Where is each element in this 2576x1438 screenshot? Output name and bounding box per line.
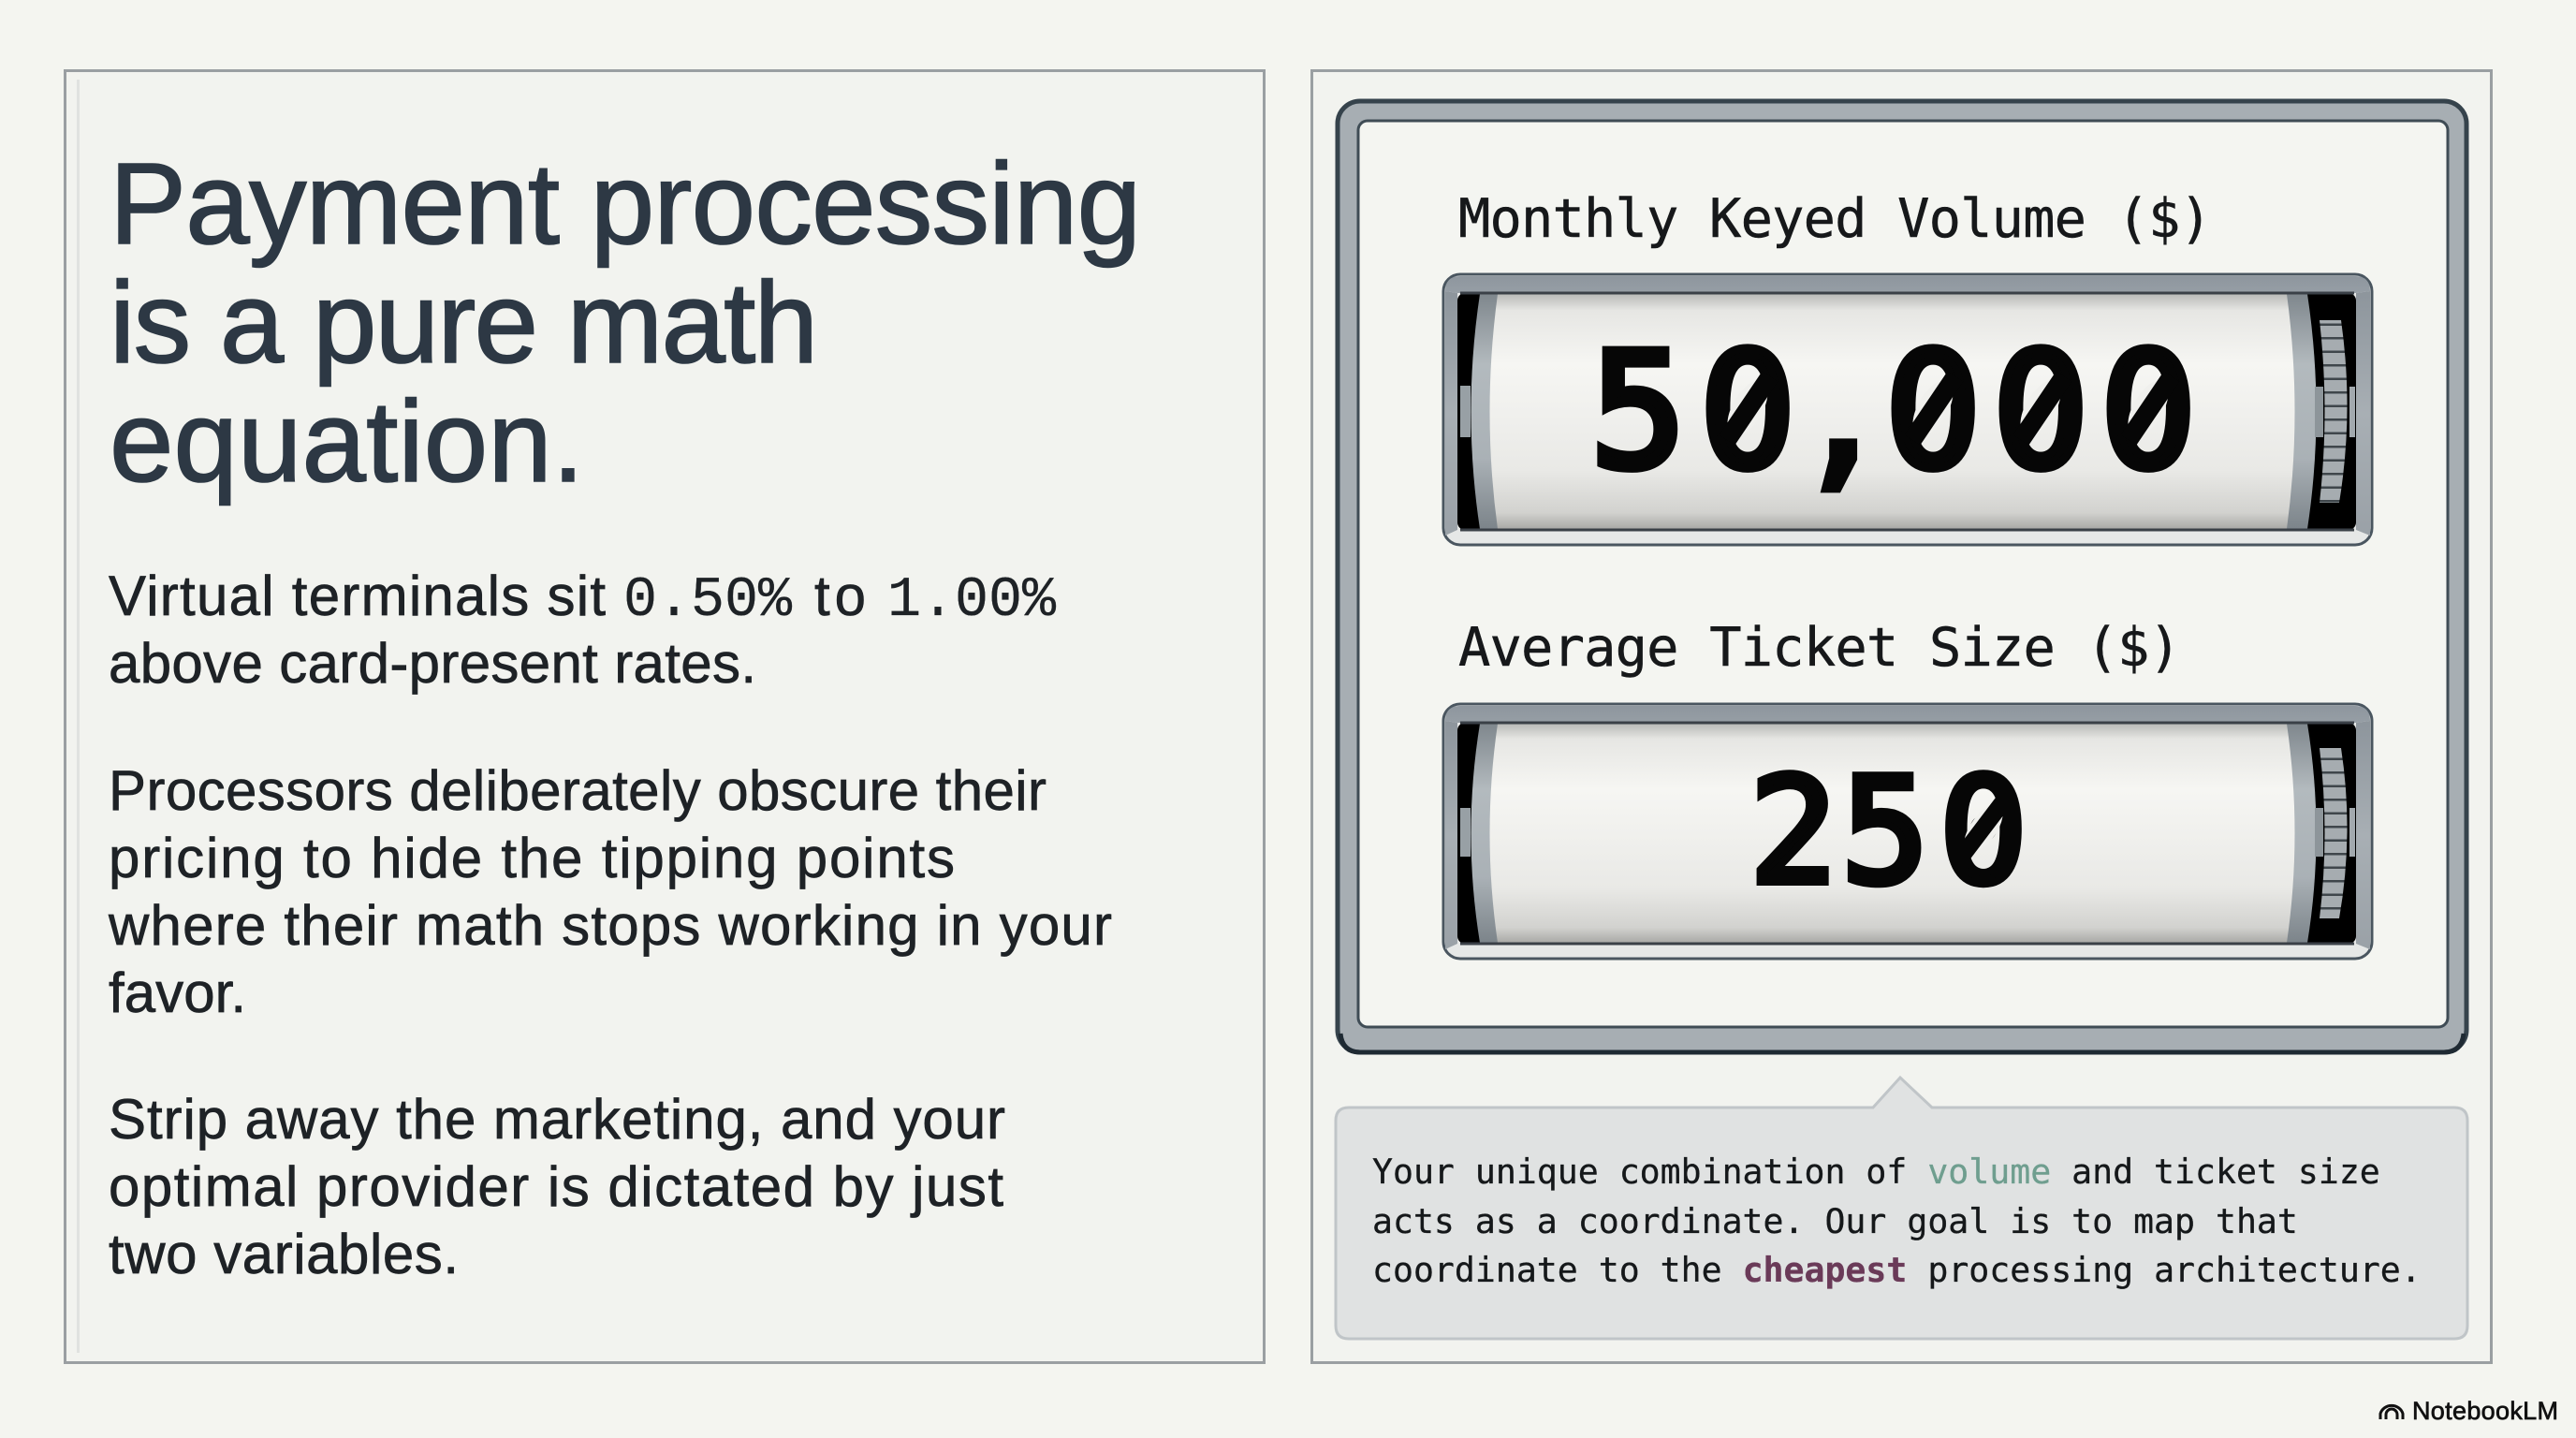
text block: surcharge: Virtual terminals sit	[109, 565, 606, 627]
label: monthly volume: Monthly Keyed Volume ($)	[1458, 188, 2212, 250]
title	[110, 140, 1141, 506]
callout: Your unique combination of	[1372, 1152, 1927, 1192]
value: 250	[1749, 746, 2027, 917]
roller: ticket size	[1443, 704, 2372, 959]
callout	[1336, 1078, 2467, 1339]
text block: surcharge: 1.00%	[887, 569, 1057, 633]
text block: surcharge: to	[814, 565, 866, 627]
text block: surcharge: above card-present rates.	[109, 632, 756, 695]
text block: surcharge	[109, 565, 1057, 695]
title: is a pure math	[110, 259, 818, 388]
text block: obscure pricing: where their math stops working in your	[108, 894, 1112, 957]
callout: volume and ticket size	[1927, 1152, 2380, 1192]
text block: surcharge: 0.50%	[623, 569, 793, 633]
text block: obscure pricing: pricing to hide the tipping points	[109, 827, 955, 889]
calculator frame	[1338, 101, 2466, 1052]
callout: cheapest processing architecture.	[1743, 1250, 2422, 1290]
text block: obscure pricing: favor.	[109, 961, 246, 1024]
text block: two variables: Strip away the marketing, and your	[109, 1088, 1005, 1151]
panel: right input	[1312, 71, 2492, 1363]
title: Payment processing	[110, 140, 1141, 269]
text block: obscure pricing: Processors deliberately obscure their	[109, 759, 1046, 822]
panel: left text	[66, 71, 1264, 1363]
text block: two variables: two variables.	[109, 1223, 459, 1285]
text block: obscure pricing	[108, 759, 1112, 1024]
title: equation.	[110, 378, 584, 506]
roller: monthly volume	[1443, 274, 2372, 545]
logo: NotebookLM: NotebookLM	[2412, 1397, 2558, 1425]
callout: coordinate to the	[1372, 1250, 1743, 1290]
text block: two variables: optimal provider is dictated by just	[109, 1155, 1003, 1218]
callout: acts as a coordinate. Our goal is to map that	[1372, 1201, 2298, 1241]
icon: notebook arcs	[2380, 1405, 2403, 1419]
text block: two variables	[109, 1088, 1005, 1285]
label: ticket size: Average Ticket Size ($)	[1458, 617, 2181, 679]
value: 50,000	[1590, 319, 2196, 505]
